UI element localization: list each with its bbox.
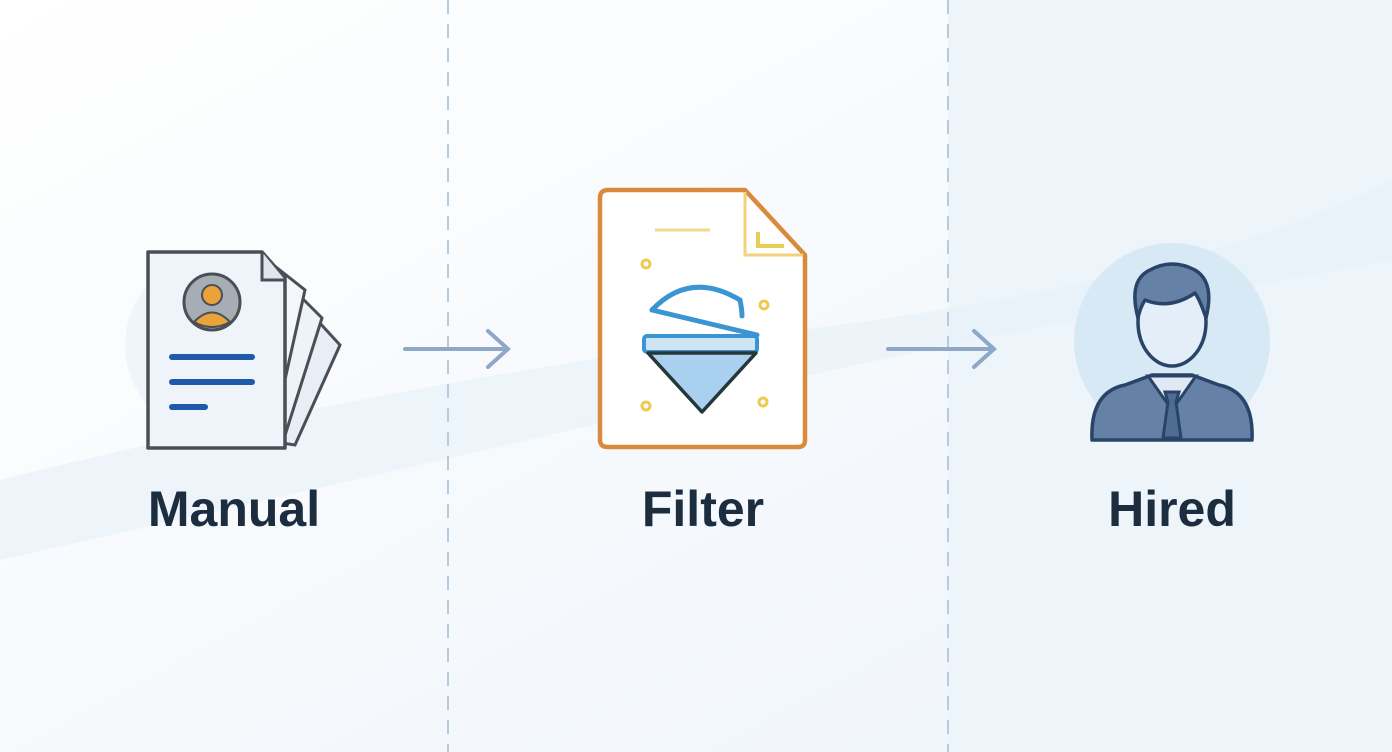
icon: filter document	[600, 190, 805, 447]
label: Manual: Manual	[148, 481, 320, 537]
label: Filter: Filter	[642, 481, 764, 537]
icon: hired person	[1074, 243, 1270, 440]
arrow 1	[405, 331, 508, 367]
icon: manual resumes	[125, 252, 340, 448]
arrow 2	[888, 331, 994, 367]
label: Hired: Hired	[1108, 481, 1236, 537]
